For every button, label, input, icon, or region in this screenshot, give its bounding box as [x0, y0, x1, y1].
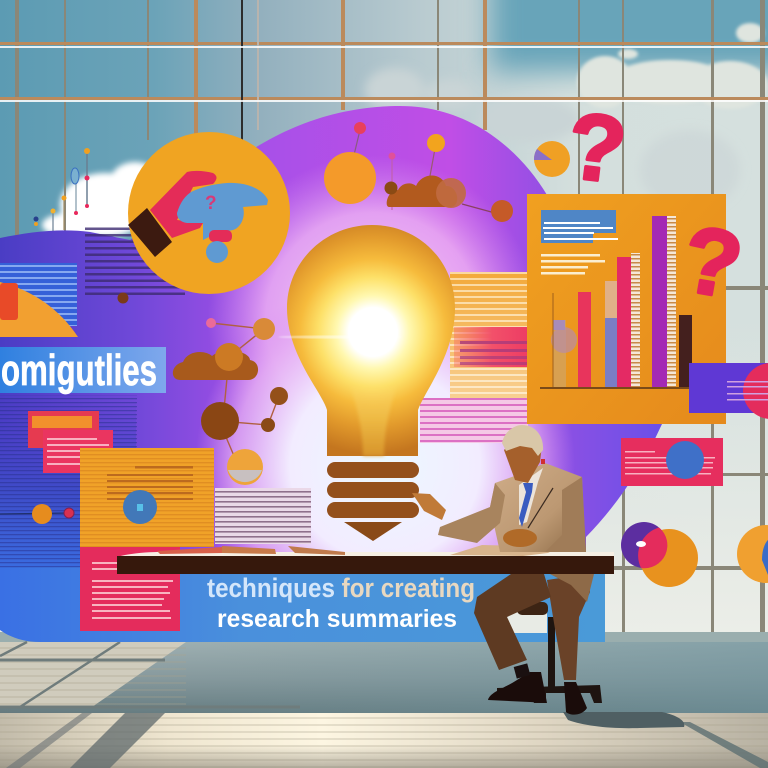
panel: grey striped panel: [215, 488, 311, 544]
icon: question mark top: ?: [562, 92, 632, 203]
red text cards: [28, 411, 113, 473]
legs: [474, 574, 590, 680]
network: left cloud and nodes: [173, 318, 288, 485]
floor: [0, 632, 768, 768]
panel: main purple blob: [0, 106, 662, 642]
network: top circles and cloud: [324, 122, 513, 222]
hand: [412, 493, 446, 520]
lapel: [528, 488, 553, 528]
heading: garbled title: omigutlies: [1, 346, 157, 395]
overlapping circles: [621, 522, 698, 587]
left connector dots: [0, 504, 74, 524]
head: [502, 425, 545, 483]
chair: [497, 602, 602, 703]
icon: pie chart: [534, 141, 570, 177]
panel: orange text panel with blue circle: [80, 448, 214, 547]
chart bars: [540, 216, 692, 389]
red callout bar: [454, 327, 564, 367]
person at desk: [412, 425, 602, 715]
sky pins: [34, 148, 90, 245]
red card with blue circle: [621, 438, 723, 486]
chart text block: [541, 210, 618, 274]
panel: bar chart: [527, 194, 726, 424]
panel: red text panel: [80, 547, 180, 631]
writing hand: [503, 529, 537, 547]
heading: subtitle: techniques for creating: [207, 573, 475, 603]
icon: light bulb: [278, 225, 455, 541]
tie: [519, 483, 533, 527]
jacket: [490, 463, 586, 552]
desk: [117, 545, 614, 574]
heading: subtitle: [207, 573, 475, 633]
panel: left stripes: [0, 227, 185, 570]
heading: subtitle: research summaries: [217, 605, 457, 633]
arm: [438, 483, 505, 543]
icon: orange circle with pointing hand: [128, 132, 290, 294]
purple box at right: [689, 363, 768, 419]
orange circle at right edge: [737, 525, 768, 583]
orange semicircle: [0, 282, 78, 337]
shoes: [488, 663, 587, 715]
jacket lower: [537, 574, 594, 602]
panel: striped orange and pink bands: [420, 272, 528, 443]
icon: question mark on chart: ?: [675, 205, 750, 319]
shirt: [519, 468, 543, 525]
icon: orange circle with pointing hand: ?: [205, 193, 217, 214]
